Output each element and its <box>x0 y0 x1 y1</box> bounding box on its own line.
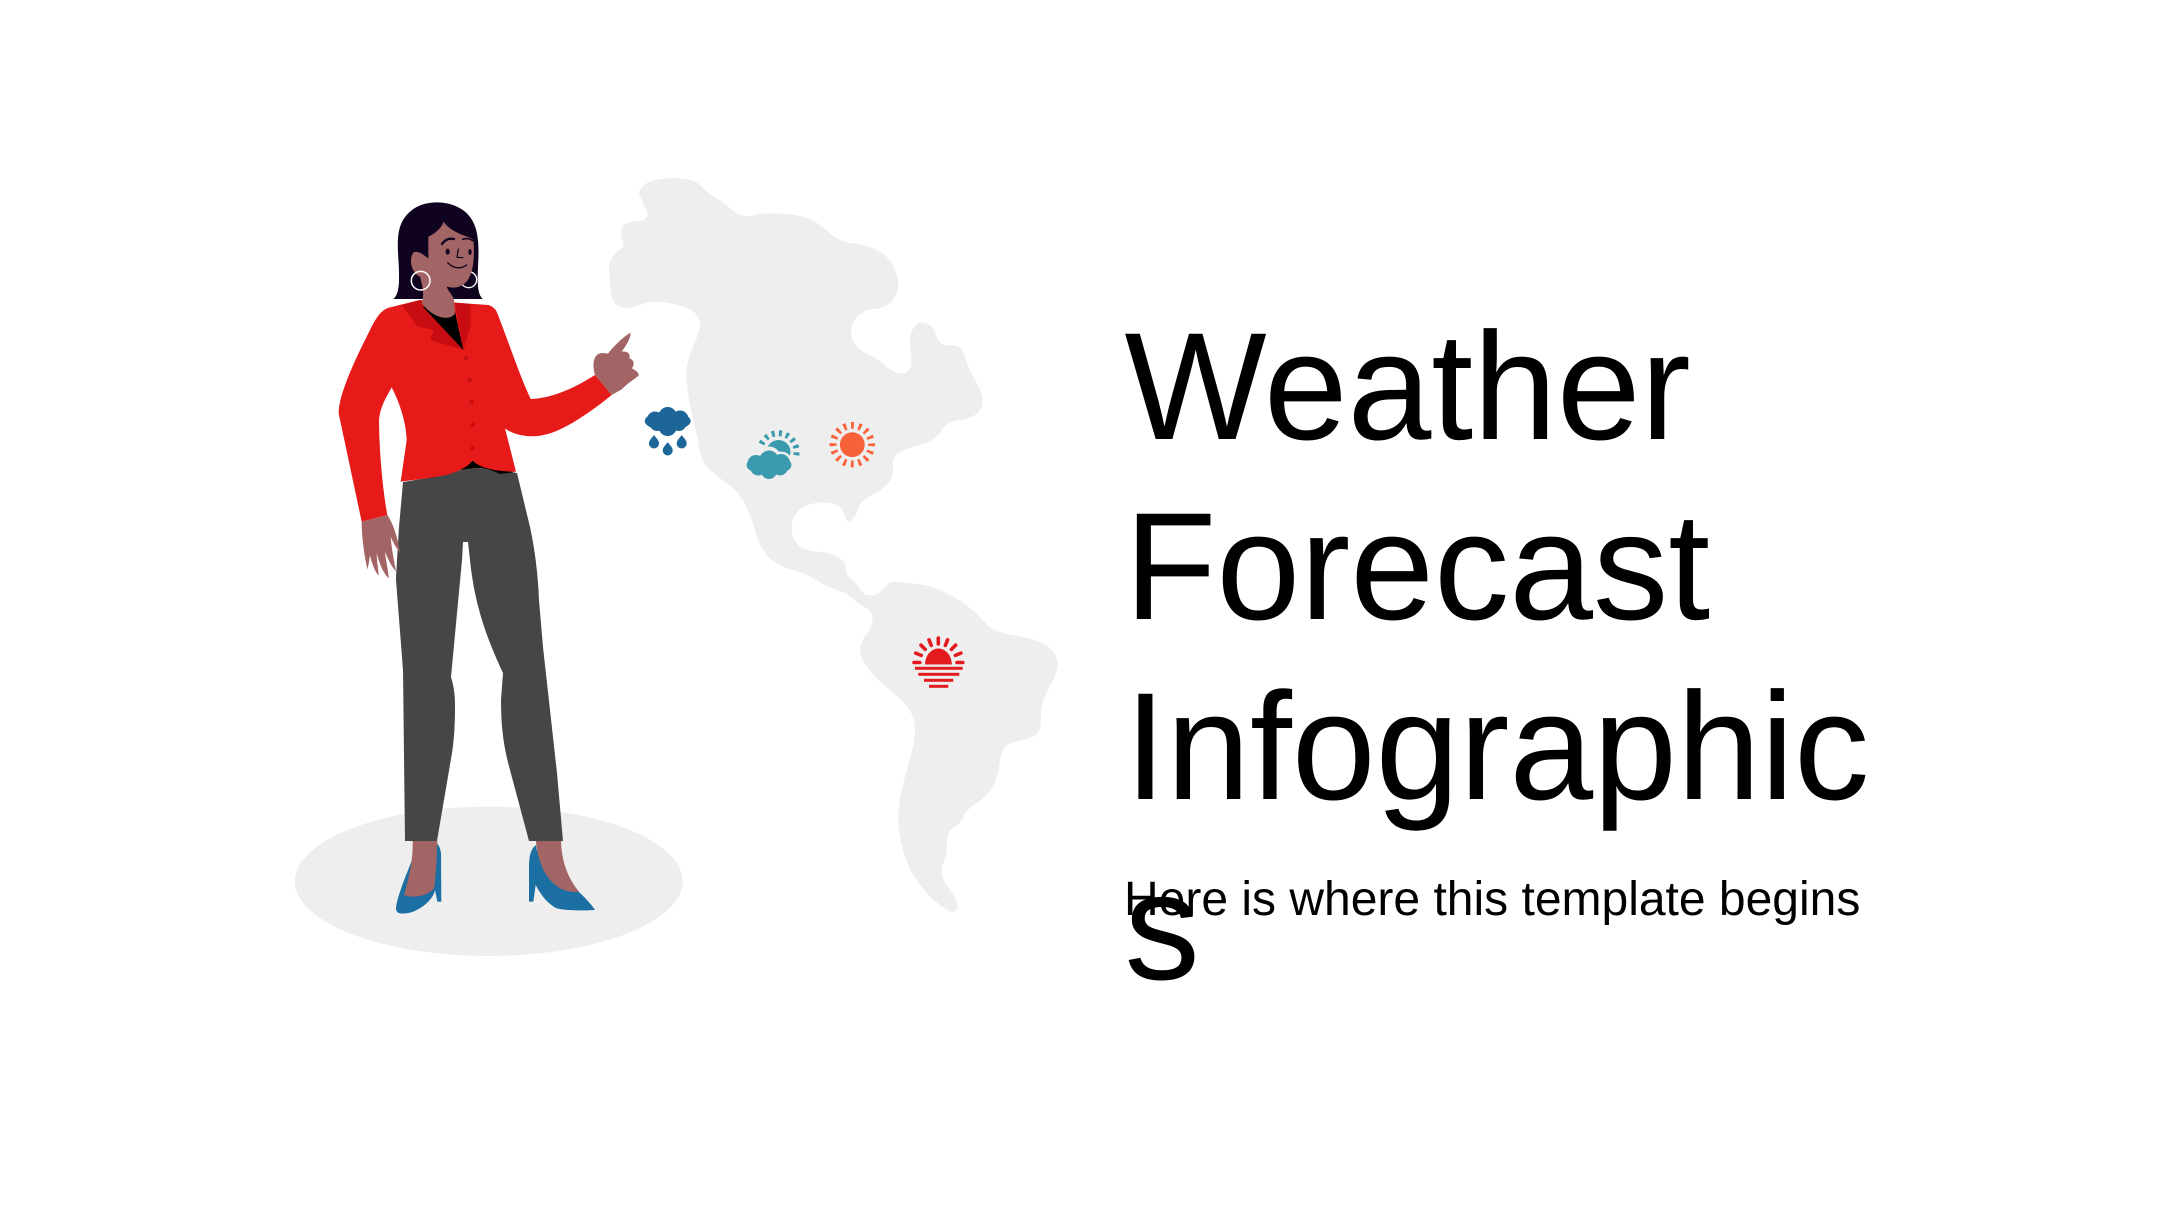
upper body <box>339 202 639 578</box>
left hand <box>362 515 400 578</box>
disc <box>840 432 865 457</box>
subtitle: Here is where this template begins <box>1124 873 1860 926</box>
title: Weather <box>1124 302 1691 472</box>
right shoe <box>529 845 595 910</box>
cloud outline gap <box>746 446 792 475</box>
left eyebrow <box>442 239 454 244</box>
right eyebrow <box>463 239 473 241</box>
pointing hand <box>593 333 639 395</box>
rays <box>833 426 872 464</box>
map of the Americas <box>609 178 1058 912</box>
face and neck <box>411 222 474 318</box>
trousers <box>396 467 563 841</box>
near earring <box>411 271 430 290</box>
right foot <box>536 841 579 892</box>
title <box>1124 302 1869 1012</box>
left eye <box>446 249 450 255</box>
half sun <box>925 648 952 664</box>
icon: sun <box>833 426 872 464</box>
red jacket <box>339 300 612 522</box>
icon: partly cloudy <box>746 433 797 479</box>
nose <box>457 249 463 258</box>
right eye <box>468 249 472 255</box>
rays <box>914 638 963 662</box>
smile <box>448 263 467 268</box>
black top <box>423 307 463 350</box>
far earring <box>461 272 477 288</box>
title: Infographic <box>1124 662 1869 832</box>
left shoe <box>396 842 441 914</box>
icon: rain cloud <box>645 407 691 456</box>
horizon lines <box>915 667 963 688</box>
cloud <box>746 450 792 479</box>
icon: sunset <box>914 638 963 688</box>
woman presenter <box>339 202 639 914</box>
undershirt strip <box>427 461 516 479</box>
title: Forecast <box>1124 482 1710 652</box>
hair <box>393 202 483 299</box>
lapels <box>402 300 471 350</box>
feet and shoes <box>396 841 595 914</box>
jacket buttons <box>464 356 475 451</box>
sun rays <box>762 433 797 458</box>
sun body <box>766 440 790 464</box>
ground shadow ellipse <box>295 807 683 956</box>
facial features <box>442 239 473 268</box>
title: s <box>1124 842 1200 1012</box>
left foot <box>404 841 437 897</box>
